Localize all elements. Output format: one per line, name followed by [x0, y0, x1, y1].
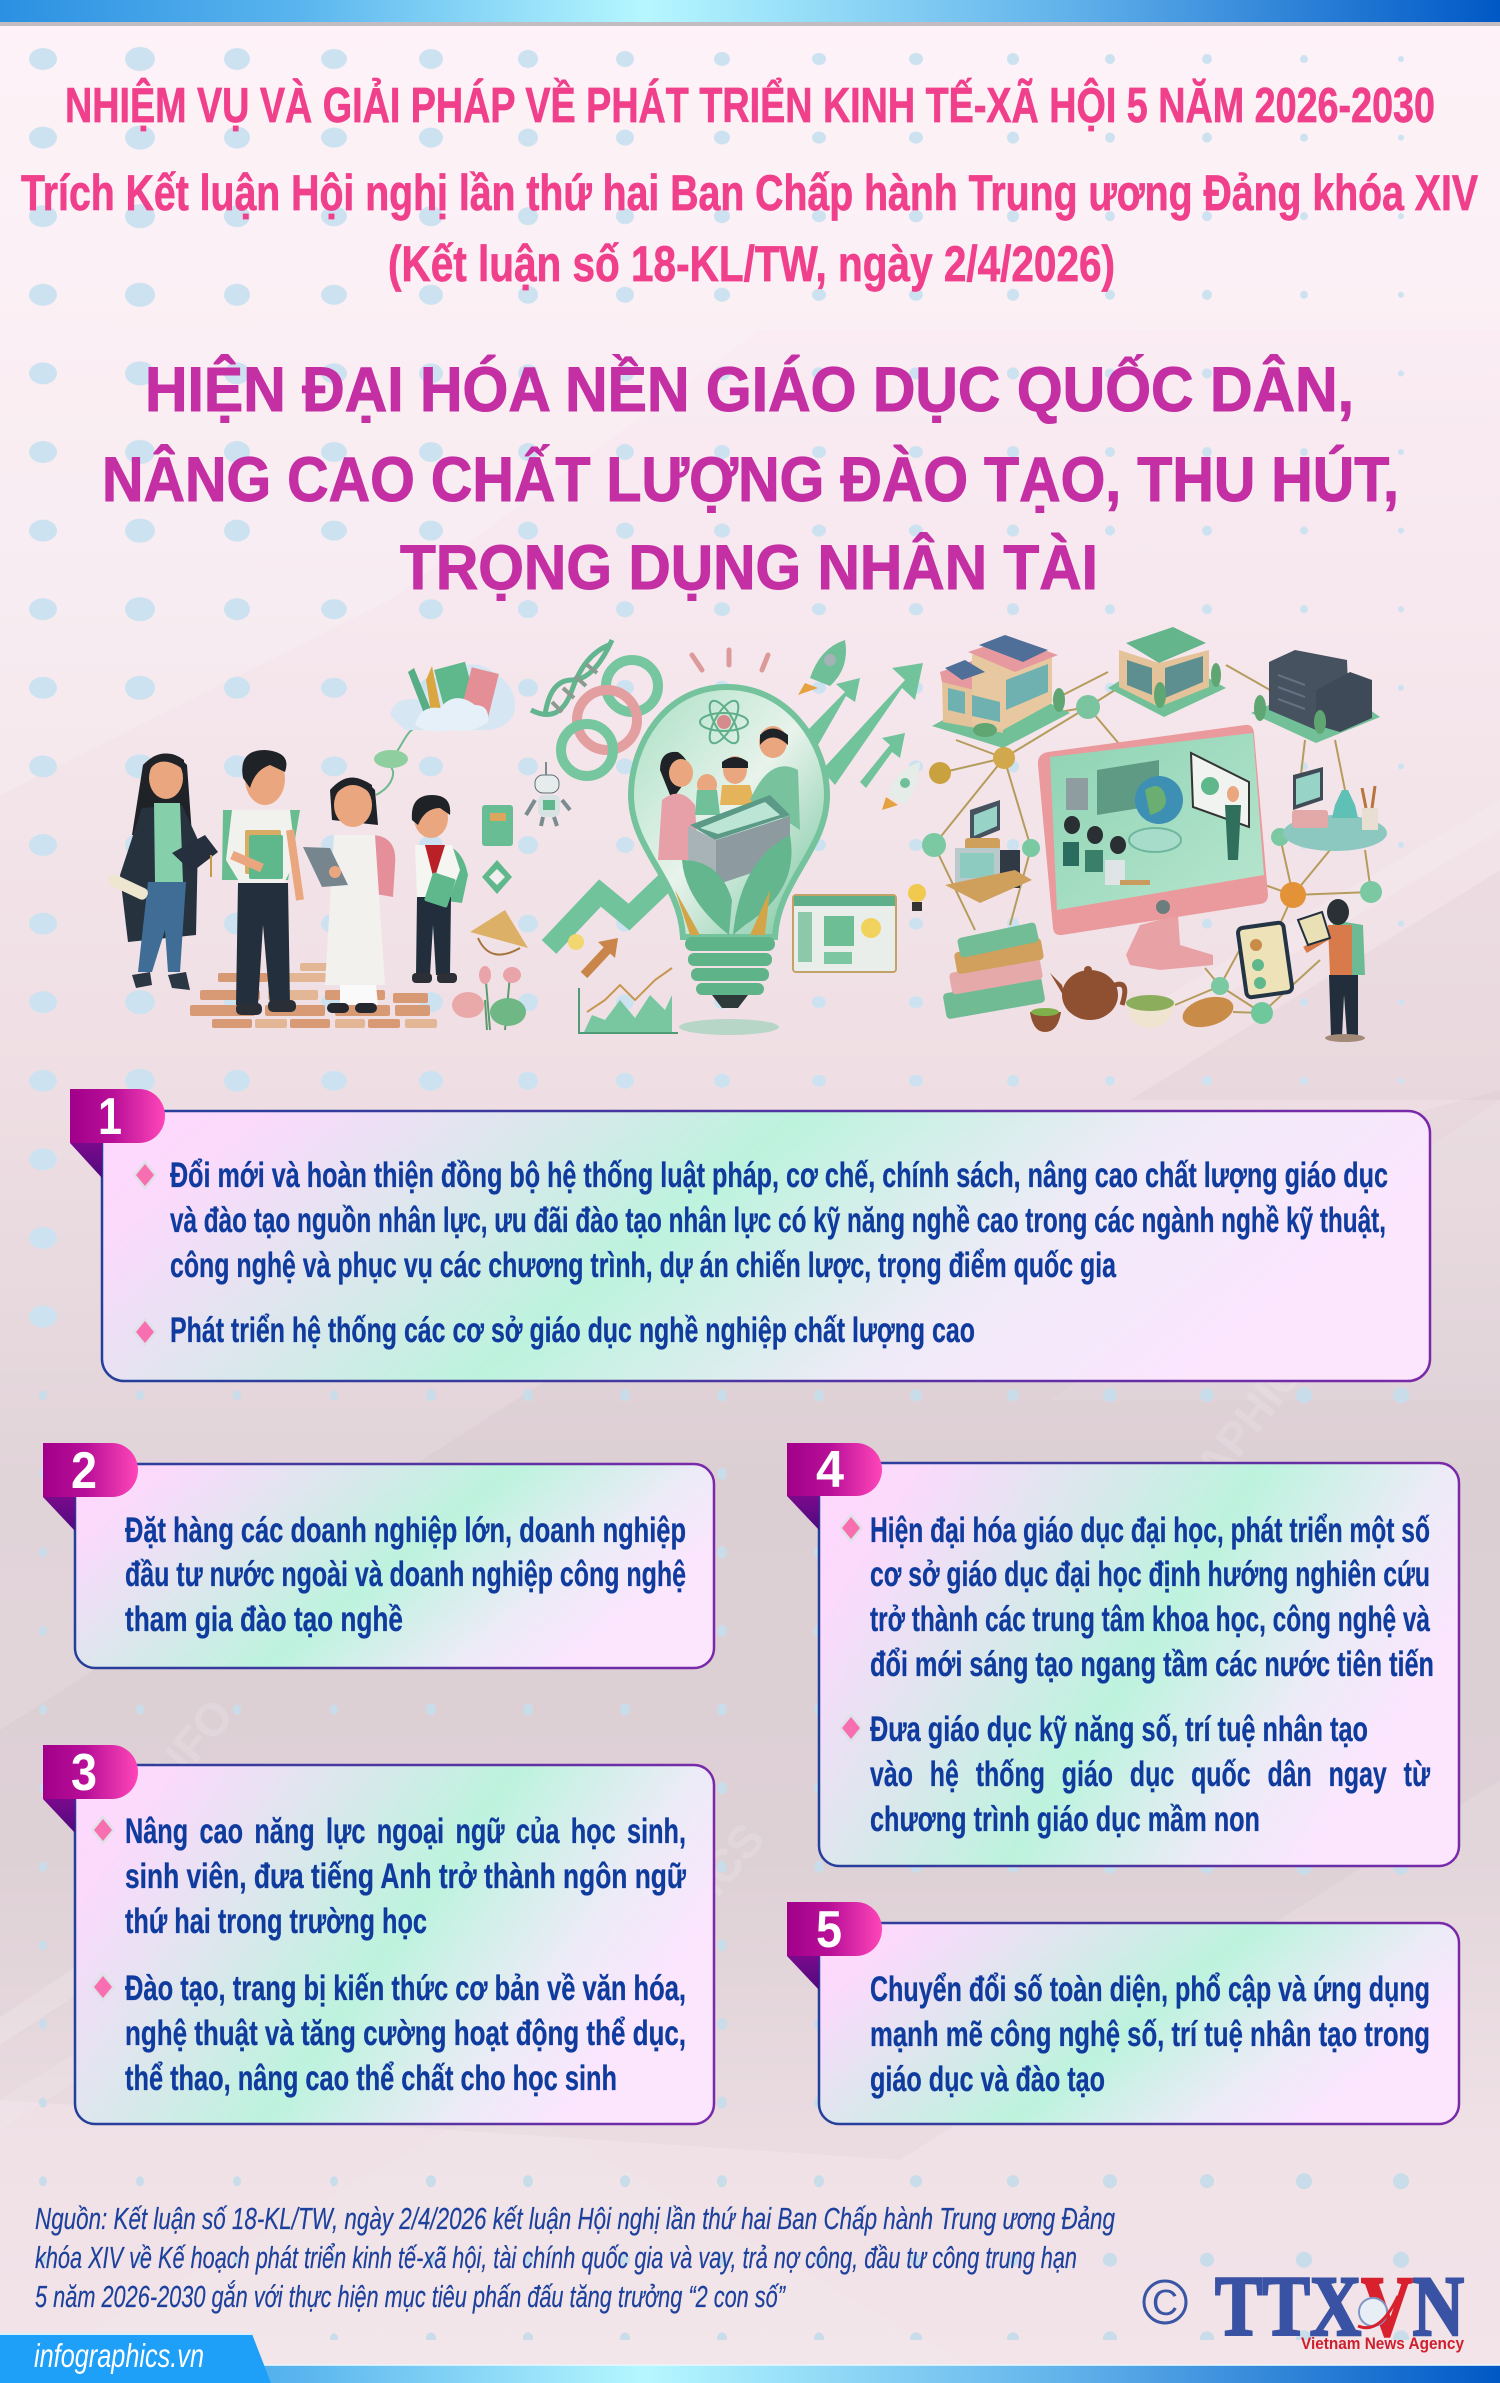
- text: panel 3 first item: [125, 1812, 686, 1941]
- panel 3: [43, 1744, 714, 2124]
- text: panel 3 second item: [125, 1969, 686, 2098]
- text: panel 4 second item: chương trình giáo dục mầm non: [870, 1800, 1260, 1839]
- bullet diamond: [91, 1972, 115, 2002]
- source note: Nguồn: Kết luận số 18-KL/TW, ngày 2/4/2026 kết luận Hội nghị lần thứ hai Ban Chấp hành Trung ương Đảng: [35, 2201, 1115, 2236]
- number badge 4: 4: [816, 1441, 844, 1499]
- panel 2: [43, 1442, 714, 1668]
- icon: small lightbulb: [908, 884, 926, 911]
- copyright mark: [1144, 2281, 1186, 2323]
- icon: school building: [932, 635, 1070, 748]
- screen content: [1063, 753, 1249, 885]
- website tab: [0, 2333, 271, 2383]
- number badge 4: [787, 1441, 882, 1530]
- icon: light bulb with family: [631, 650, 827, 1035]
- main heading: [102, 354, 1399, 603]
- figure: schoolboy with red scarf: [412, 795, 468, 983]
- number badge 3: 3: [71, 1744, 97, 1802]
- wordmark: TTXVN: [1215, 2258, 1464, 2354]
- icon: book stack: [943, 922, 1045, 1019]
- watermarks: TTXVN: [526, 1512, 655, 1666]
- text: panel 2: Đặt hàng các doanh nghiệp lớn, doanh nghiệp: [125, 1511, 686, 1550]
- icon: library building: [1108, 627, 1226, 717]
- text: panel 3 second item: thể thao, nâng cao thể chất cho học sinh: [125, 2059, 617, 2098]
- figure: graduate woman: [106, 754, 218, 990]
- icon: linked rings: [561, 660, 658, 776]
- arrow: zigzag growth: [549, 872, 676, 950]
- figure: girl in ao dai with tablet: [303, 778, 395, 1013]
- watermarks: GRAPHICS: [1142, 1323, 1332, 1546]
- logo: TTXVN: [1144, 2258, 1464, 2354]
- text: panel 3 first item: thứ hai trong trường học: [125, 1902, 427, 1941]
- icon: small robot: [526, 762, 570, 826]
- icon: small green book and diamond: [482, 805, 513, 894]
- icon: digital tablet: [1237, 922, 1293, 998]
- figures in bulb: [658, 726, 800, 885]
- icon: teapot and cup: [1030, 966, 1125, 1032]
- panel 5: [787, 1901, 1459, 2124]
- number badge 2: [43, 1442, 138, 1531]
- title block: [21, 78, 1478, 292]
- icon: bricks path: [190, 963, 437, 1028]
- icon: desktop computers on desk: [945, 800, 1032, 903]
- text: panel 2: đầu tư nước ngoài và doanh nghiệp công nghệ: [125, 1555, 686, 1594]
- arrow: small brown: [584, 938, 618, 975]
- bullet diamond: [839, 1713, 863, 1743]
- arrows: rising from bulb: [808, 663, 923, 788]
- panel 1: [70, 1088, 1430, 1381]
- main heading: TRỌNG DỤNG NHÂN TÀI: [400, 532, 1098, 603]
- icon: data servers: [1251, 650, 1380, 743]
- icon: lotus flowers: [452, 966, 526, 1030]
- number badge 2: 2: [71, 1442, 97, 1500]
- number badge 5: [787, 1901, 882, 1990]
- icon: DNA helix: [531, 640, 612, 715]
- top gradient bar: [0, 0, 1500, 26]
- text: panel 5: giáo dục và đào tạo: [870, 2060, 1105, 2099]
- text: panel 3 first item: Nâng cao năng lực ngoại ngữ của học sinh,: [125, 1812, 686, 1851]
- text: panel 3 second item: nghệ thuật và tăng cường hoạt động thể dục,: [125, 2014, 686, 2053]
- figure: boy with books: [222, 750, 300, 1015]
- panel 4: [787, 1441, 1459, 1866]
- icon: noodle bowl and banh mi: [1126, 992, 1237, 1032]
- network lines: [934, 665, 1371, 1013]
- bullet diamond: [91, 1815, 115, 1845]
- text: panel 4 first item: [870, 1511, 1434, 1684]
- copyright mark: C: [1152, 2282, 1178, 2323]
- text: panel 4 second item: [870, 1710, 1430, 1839]
- chart: area trend: [579, 968, 678, 1033]
- number badge 5: 5: [816, 1901, 842, 1959]
- bullet diamond: [839, 1513, 863, 1543]
- bottom bar: [0, 2364, 1500, 2383]
- bullet diamond: [133, 1317, 157, 1347]
- text: panel 5: [870, 1970, 1430, 2099]
- main heading: HIỆN ĐẠI HÓA NỀN GIÁO DỤC QUỐC DÂN,: [145, 354, 1354, 425]
- bullet diamond: [133, 1160, 157, 1190]
- card: web window: [793, 895, 896, 972]
- source note: khóa XIV về Kế hoạch phát triển kinh tế-xã hội, tài chính quốc gia và vay, trả nợ công, đầu tư công trung hạn: [35, 2240, 1077, 2275]
- watermarks: INFOGRAPHICS: [508, 1813, 774, 2116]
- source note: 5 năm 2026-2030 gắn với thực hiện mục tiêu phấn đấu tăng trưởng “2 con số”: [35, 2279, 786, 2314]
- watermarks: INFO: [133, 1689, 243, 1806]
- watermarks: [133, 1323, 1444, 2136]
- illustration: education hero: [106, 627, 1387, 1042]
- icon: rockets: [798, 640, 920, 810]
- text: panel 2: [125, 1511, 686, 1639]
- number badge 3: [43, 1744, 138, 1833]
- main heading: NÂNG CAO CHẤT LƯỢNG ĐÀO TẠO, THU HÚT,: [102, 444, 1399, 515]
- title block: (Kết luận số 18-KL/TW, ngày 2/4/2026): [388, 236, 1115, 292]
- icon: conical hat: [470, 910, 528, 955]
- screw base: [679, 937, 779, 1035]
- text: panel 3 second item: Đào tạo, trang bị kiến thức cơ bản về văn hóa,: [125, 1969, 686, 2008]
- text: panel 1 first item: công nghệ và phục vụ các chương trình, dự án chiến lược, trọng điểm quốc gia: [170, 1246, 1116, 1285]
- plant: [675, 835, 792, 935]
- icon: computer with virtual classroom: [1038, 725, 1268, 970]
- website tab: infographics.vn: [34, 2337, 204, 2374]
- text: panel 2: tham gia đào tạo nghề: [125, 1600, 403, 1639]
- number badge 1: 1: [98, 1088, 122, 1146]
- wordmark: Vietnam News Agency: [1301, 2334, 1464, 2353]
- source note: [35, 2201, 1115, 2314]
- node icons: [922, 695, 1382, 1024]
- number badge 1: [70, 1088, 165, 1178]
- text: panel 1 second item: Phát triển hệ thống các cơ sở giáo dục nghề nghiệp chất lượng cao: [170, 1311, 975, 1350]
- watermarks: GRAPHICS: [1248, 1917, 1444, 2136]
- figure: student with backpack: [1298, 899, 1365, 1042]
- icon: cloud with books: [374, 662, 515, 795]
- text: panel 3 first item: sinh viên, đưa tiếng Anh trở thành ngôn ngữ: [125, 1857, 686, 1896]
- icon: table with beaker and books: [1283, 767, 1387, 851]
- text: panel 1 first item: [170, 1156, 1388, 1285]
